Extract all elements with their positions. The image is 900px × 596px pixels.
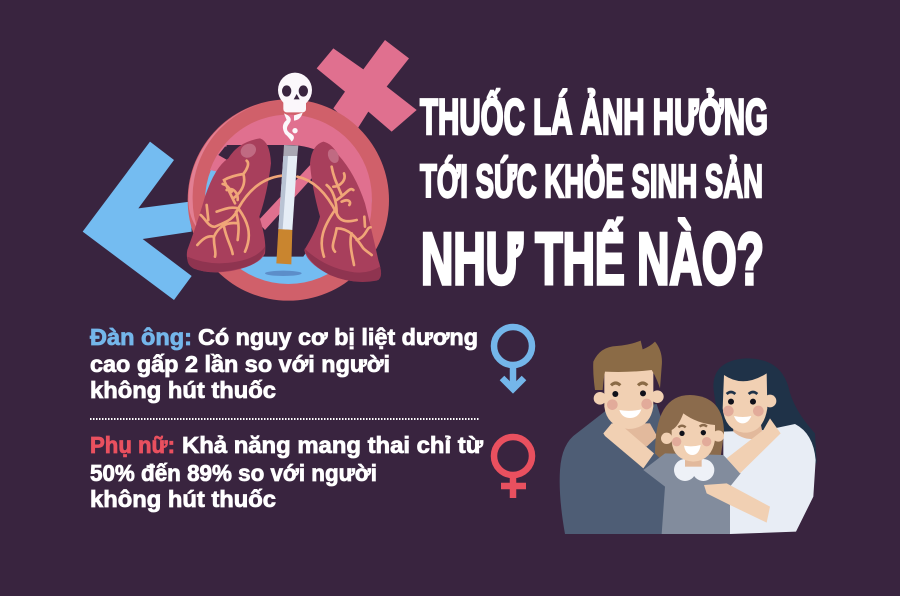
woman (713, 358, 817, 534)
men line 2: cao gấp 2 lần so với người (90, 351, 390, 377)
man (560, 341, 665, 534)
icon: right lung (297, 142, 381, 282)
child (603, 395, 781, 534)
icon: female symbol (494, 437, 532, 498)
icon: female cross (317, 40, 417, 132)
text block: men (90, 324, 478, 403)
illustration: happy family (560, 341, 817, 534)
illustration: gender symbols, no-smoking sign and lungs (83, 40, 417, 301)
men line 3: không hút thuốc (90, 377, 276, 403)
icon: prohibition sign (188, 99, 389, 301)
icon: left lung (187, 138, 282, 272)
icon: skull and smoke (278, 73, 312, 142)
women line 3: không hút thuốc (90, 486, 276, 512)
women line 2: 50% đến 89% so với người (90, 460, 377, 486)
men line 1: Có nguy cơ bị liệt dương (198, 324, 478, 350)
text block: women (90, 432, 483, 512)
icon: male symbol (494, 327, 532, 389)
title (420, 88, 768, 300)
icon: male arrow (83, 142, 192, 300)
icon: cigarette (276, 145, 298, 264)
label: women: Phụ nữ: (90, 432, 175, 458)
label: men: Đàn ông: (90, 324, 192, 350)
women line 1: Khả năng mang thai chỉ từ (182, 432, 483, 458)
